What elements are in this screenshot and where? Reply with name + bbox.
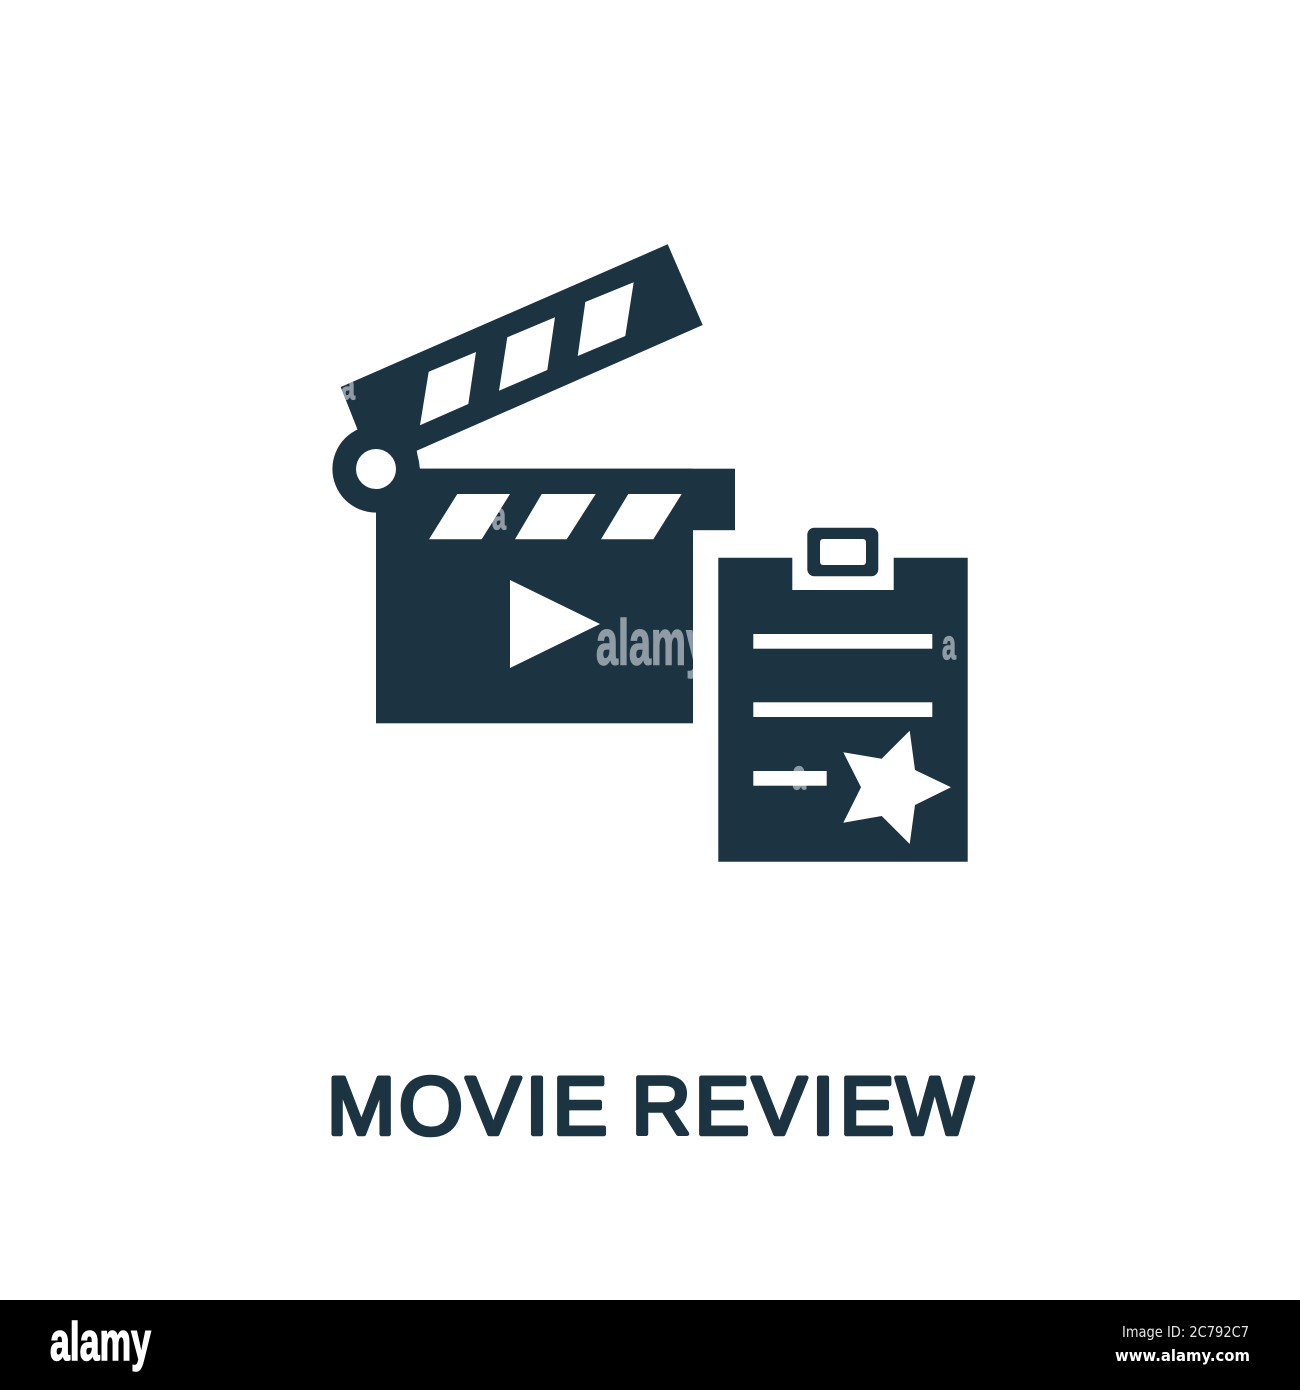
clipboard sheet <box>718 558 968 862</box>
text line 1 <box>753 634 932 649</box>
watermark: alamy: alamy <box>596 606 708 678</box>
icon: clapperboard <box>332 244 735 723</box>
clapper top bar <box>376 469 735 530</box>
text line 3 <box>753 771 827 786</box>
lid stripe 3 <box>578 282 634 356</box>
star rating <box>843 731 951 844</box>
clapper body <box>376 469 693 723</box>
footer background <box>0 1300 1300 1390</box>
bar stripe 3 <box>601 494 682 539</box>
bar stripe 2 <box>515 494 596 539</box>
watermark: letter on top bar: a <box>492 496 507 538</box>
watermark letters on icon <box>341 366 956 798</box>
watermark: letter on clipboard right: a <box>942 621 956 668</box>
title: MOVIE REVIEW <box>327 1061 974 1152</box>
bar stripe 1 <box>429 494 510 539</box>
clapper hinge <box>332 425 420 513</box>
clapper lid <box>341 244 703 469</box>
website: www.alamy.com <box>1115 1346 1250 1365</box>
watermark: letter on lid: a <box>341 366 356 408</box>
clipboard clip <box>807 528 878 576</box>
text line 2 <box>753 702 932 717</box>
image id: Image ID: 2C792C7 <box>1122 1323 1249 1341</box>
footer logo: alamy <box>50 1312 151 1372</box>
lid stripe 1 <box>420 352 476 425</box>
play triangle <box>510 580 600 668</box>
hinge hole <box>356 449 396 489</box>
clip window <box>820 539 866 565</box>
clapper cut-outs <box>356 282 682 668</box>
clipboard cut-outs <box>753 539 951 844</box>
lid stripe 2 <box>499 317 555 391</box>
watermark: letter on clipboard lower: a <box>792 751 806 798</box>
footer bar <box>0 1300 1300 1390</box>
icon: review clipboard <box>718 528 968 862</box>
